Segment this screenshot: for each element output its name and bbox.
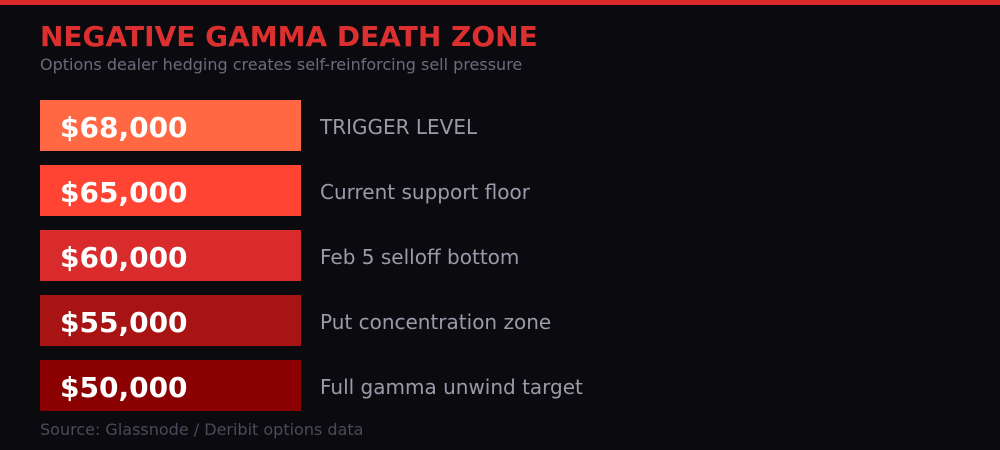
source: Source: Glassnode / Deribit options data — [40, 420, 363, 439]
bar: 55000 — [40, 295, 301, 346]
bar: 65000 — [40, 165, 301, 216]
label: unwind: Full gamma unwind target — [320, 375, 583, 399]
bar: 68000 — [40, 100, 301, 151]
bar: 65000: $65,000 — [60, 176, 188, 209]
bar: 50000: $50,000 — [60, 371, 188, 404]
bar: 50000 — [40, 360, 301, 411]
bar: 60000 — [40, 230, 301, 281]
bar: 60000: $60,000 — [60, 241, 188, 274]
label: feb 5: Feb 5 selloff bottom — [320, 245, 519, 269]
bar: 55000: $55,000 — [60, 306, 188, 339]
bar: 68000: $68,000 — [60, 111, 188, 144]
subtitle: Options dealer hedging creates self-reinforcing sell pressure — [40, 55, 522, 74]
label: put zone: Put concentration zone — [320, 310, 551, 334]
label: trigger: TRIGGER LEVEL — [320, 115, 477, 139]
title: NEGATIVE GAMMA DEATH ZONE — [40, 20, 538, 53]
label: support: Current support floor — [320, 180, 530, 204]
